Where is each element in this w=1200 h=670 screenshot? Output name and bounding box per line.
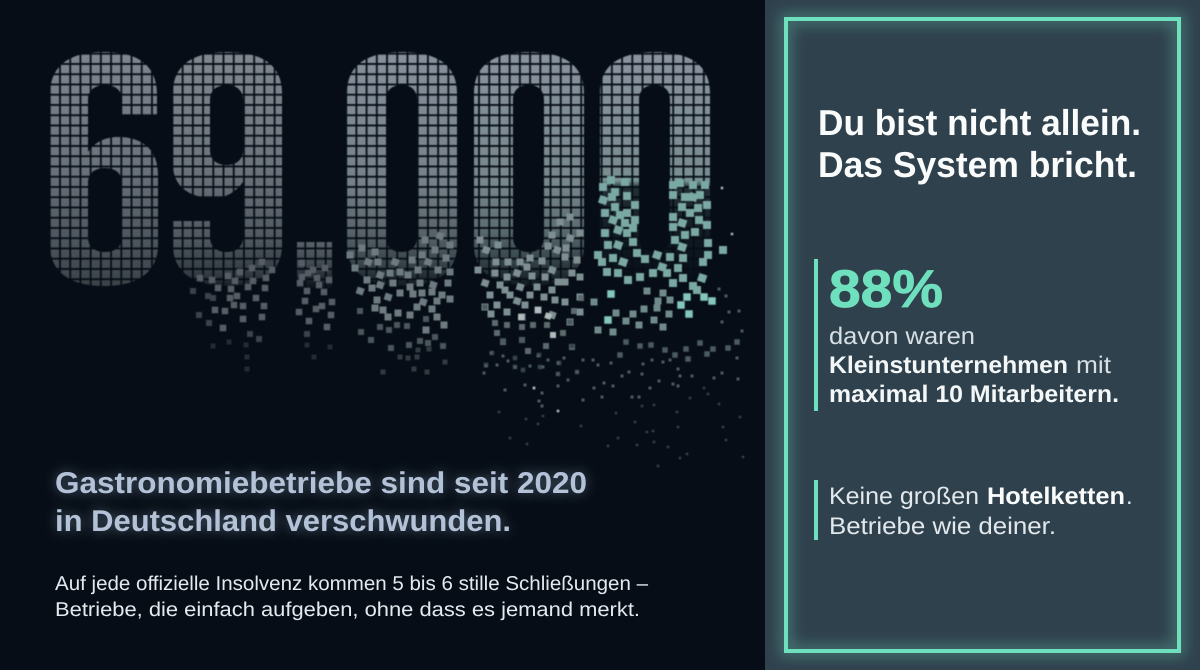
panel heading (818, 102, 1141, 185)
callout: hotel chains (814, 480, 1133, 540)
dissolving particles (193, 180, 743, 466)
callout text: Hotelketten (987, 483, 1125, 510)
subheading with glow: in Deutschland verschwunden. (55, 505, 511, 538)
panel frame glow (786, 19, 1179, 651)
big number 69.000 (50, 52, 743, 466)
panel frame (786, 19, 1179, 651)
digit 9 (173, 52, 282, 286)
panel heading: Du bist nicht allein. (818, 102, 1141, 143)
stat description: davon waren (829, 323, 975, 350)
subheading with glow: Gastronomiebetriebe sind seit 2020 (55, 467, 587, 500)
stat description (829, 323, 1119, 408)
callout text: Keine großen (829, 483, 979, 510)
callout text: Betriebe wie deiner. (829, 513, 1056, 540)
decimal point (297, 242, 332, 290)
subheading with glow (55, 467, 587, 538)
digit 6 (50, 52, 158, 286)
first zero (347, 52, 457, 286)
subheading with glow: in Deutschland verschwunden. (55, 505, 511, 538)
stat description: Kleinstunternehmen (829, 352, 1068, 379)
third zero (599, 51, 711, 254)
subheading with glow: Gastronomiebetriebe sind seit 2020 (55, 467, 587, 500)
callout text: . (1126, 483, 1133, 510)
stat value: 88% (829, 260, 943, 319)
panel heading: Das System bricht. (818, 144, 1137, 185)
body text: Auf jede offizielle Insolvenz kommen 5 bis 6 stille Schließungen – (55, 573, 649, 595)
accent bar (814, 480, 818, 540)
body text (55, 573, 649, 621)
grid digits (50, 52, 710, 290)
panel: right (765, 0, 1200, 670)
second zero (474, 52, 584, 286)
callout text (829, 483, 1133, 540)
stat block: 88% (814, 259, 1119, 411)
body text: Betriebe, die einfach aufgeben, ohne dass es jemand merkt. (55, 599, 640, 621)
stat description: mit (1076, 352, 1111, 379)
stat description: maximal 10 Mitarbeitern. (829, 381, 1119, 408)
accent bar (814, 259, 818, 411)
